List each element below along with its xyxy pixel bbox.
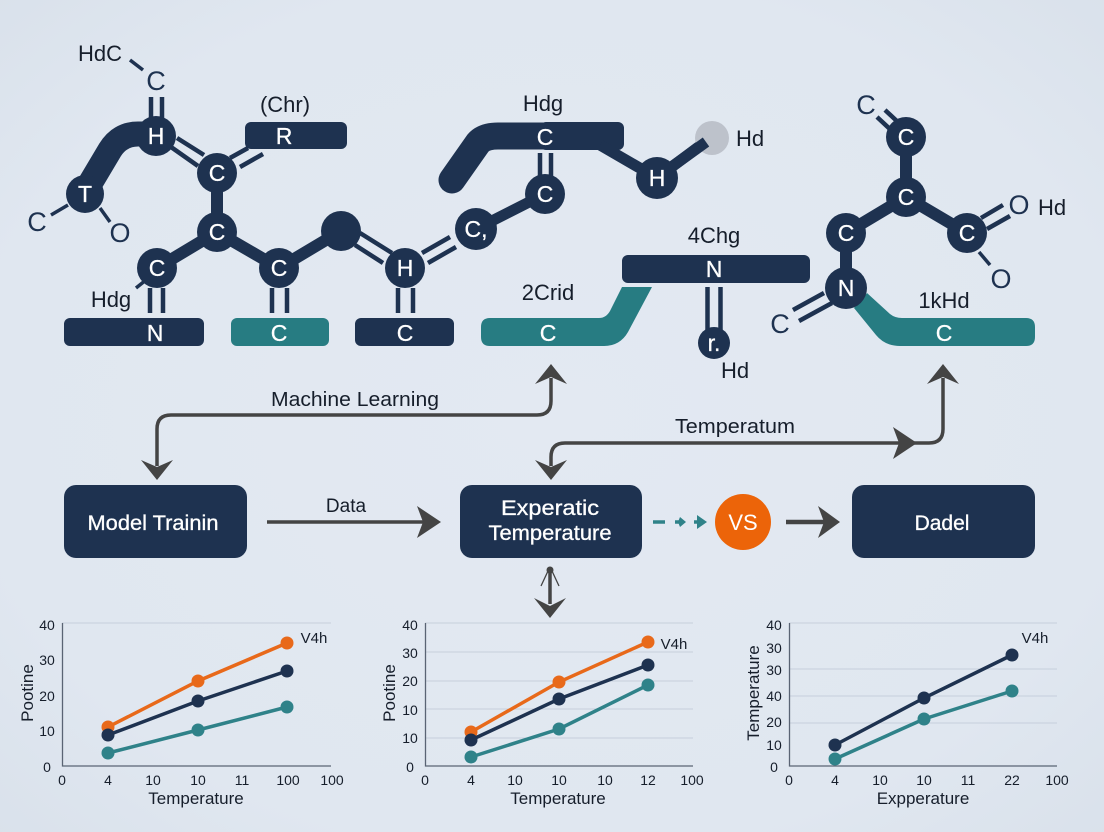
y axis ticks (39, 617, 55, 775)
atom: H lower (385, 248, 425, 288)
y axis ticks: 0 (406, 759, 414, 775)
atom: C middle: C (271, 255, 287, 281)
labels of right molecule: 1kHd (918, 288, 970, 313)
atom: H lower: H (397, 255, 413, 281)
labels of middle molecule (522, 91, 764, 383)
label: Data: Data (326, 496, 366, 517)
axis titles (18, 664, 244, 808)
labels of right molecule: C (856, 90, 876, 120)
atom: C left: C (838, 220, 854, 246)
x axis ticks: 10 (507, 772, 523, 788)
y axis ticks: 20 (766, 714, 782, 730)
series navy (828, 648, 1018, 752)
y axis ticks: 40 (39, 617, 55, 633)
atom: blank (321, 211, 361, 251)
atom: C right (947, 213, 987, 253)
bar: C (355, 318, 454, 346)
atom: C, (455, 208, 497, 250)
bar: teal C: C (271, 320, 287, 346)
labels of left molecule (27, 41, 310, 312)
badge: VS (715, 494, 771, 550)
atom: T: T (78, 181, 92, 207)
x axis ticks: 10 (872, 772, 888, 788)
y axis ticks (402, 617, 418, 775)
badge: VS: VS (728, 510, 758, 535)
atom: gray (695, 121, 729, 155)
atom: C middle (259, 248, 299, 288)
arrow: dashed teal (653, 515, 707, 529)
bonds of middle molecule (452, 122, 705, 229)
panel: middle molecule (452, 91, 810, 383)
arrow: temperature loop (535, 364, 959, 480)
atom: C top (886, 117, 926, 157)
arrow: Data (267, 506, 441, 538)
bar: N (622, 255, 810, 283)
atom: C left: C (149, 255, 165, 281)
teal bar: C with arm (854, 293, 1035, 346)
label: V4h: V4h (661, 636, 687, 653)
panel: left molecule (27, 41, 456, 346)
x axis ticks (58, 772, 344, 788)
axis titles (380, 664, 606, 808)
axis titles: Temperature (510, 789, 606, 808)
series orange (102, 636, 294, 734)
axis titles: Expperature (877, 789, 969, 808)
atom: H (136, 116, 176, 156)
labels of right molecule: C (770, 309, 790, 339)
x axis ticks: 4 (831, 772, 839, 788)
axis titles: Temperature (744, 645, 763, 741)
x axis ticks: 4 (104, 772, 112, 788)
axis titles (744, 645, 969, 808)
y axis ticks (766, 617, 782, 775)
y axis ticks: 10 (402, 730, 418, 746)
atom: H (636, 157, 678, 199)
label: top bar C: C (537, 124, 553, 150)
x axis ticks: 10 (551, 772, 567, 788)
bond and atom: r.: r. (708, 330, 720, 356)
atom: C right: C (959, 220, 975, 246)
y axis ticks: 20 (402, 673, 418, 689)
atom: H: H (148, 123, 164, 149)
label: V4h: V4h (1022, 630, 1048, 647)
x axis ticks (421, 772, 704, 788)
y axis ticks: 30 (766, 662, 782, 678)
x axis ticks: 22 (1004, 772, 1020, 788)
x axis ticks: 10 (190, 772, 206, 788)
x axis ticks: 11 (961, 772, 975, 788)
x axis ticks: 4 (467, 772, 475, 788)
x axis ticks: 100 (276, 772, 300, 788)
y axis ticks: 20 (39, 688, 55, 704)
series teal (828, 684, 1018, 766)
panel: right molecule (770, 90, 1066, 346)
atom: C left (826, 213, 866, 253)
labels of middle molecule: 4Chg (688, 223, 740, 248)
labels of left molecule: HdC (78, 41, 122, 66)
atom: C: C (537, 181, 553, 207)
x axis ticks: 12 (640, 772, 656, 788)
y axis ticks: 10 (766, 737, 782, 753)
box: Model Trainin (64, 485, 247, 558)
arrow: VS to Dadel (786, 506, 840, 538)
box: Experatic Temperature (460, 485, 642, 558)
atom: C centre (886, 177, 926, 217)
axis titles: Temperature (148, 789, 244, 808)
bar: N: N (147, 320, 163, 346)
labels of left molecule: O (109, 218, 131, 248)
labels of right molecule: Hd (1038, 195, 1066, 220)
labels of middle molecule: Hdg (523, 91, 563, 116)
labels of left molecule: C (27, 207, 47, 237)
y axis ticks: 10 (402, 702, 418, 718)
series teal (102, 700, 294, 760)
atom: C centre: C (898, 184, 914, 210)
atom: N (825, 267, 867, 309)
bonds of right molecule (793, 110, 1010, 321)
x axis ticks: 100 (680, 772, 704, 788)
bar: N: N (706, 256, 722, 282)
atom: N: N (838, 275, 854, 301)
atom: T (66, 175, 104, 213)
box: Dadel (852, 485, 1035, 558)
atom: C left (137, 248, 177, 288)
atom: H: H (649, 165, 665, 191)
labels of right molecule: O (1008, 190, 1030, 220)
series orange (464, 636, 654, 738)
label: V4h: V4h (301, 630, 327, 647)
atom: C upper (197, 153, 237, 193)
bar: teal C (231, 318, 329, 346)
chart 3 (744, 617, 1069, 808)
arrow: machine learning loop (141, 364, 567, 480)
box: Experatic Temperature: Experatic (501, 497, 599, 520)
labels of left molecule: Hdg (91, 287, 131, 312)
x axis ticks: 100 (320, 772, 344, 788)
atom: C upper: C (209, 160, 225, 186)
y axis ticks: 40 (402, 617, 418, 633)
labels of left molecule: C (146, 66, 166, 96)
x axis ticks: 10 (597, 772, 613, 788)
labels of left molecule: (Chr) (260, 92, 310, 117)
y axis ticks: 40 (766, 617, 782, 633)
x axis ticks: 0 (785, 772, 793, 788)
label: Temperatum: Temperatum (675, 416, 795, 438)
chart 1 (18, 617, 344, 808)
atom: C centre (197, 212, 237, 252)
atom: C top: C (898, 124, 914, 150)
x axis ticks: 10 (916, 772, 932, 788)
box: Experatic Temperature: Temperature (488, 522, 612, 545)
bond and atom: r. (698, 287, 730, 359)
bonds of left molecule (51, 60, 456, 313)
y axis ticks: 30 (402, 645, 418, 661)
labels of right molecule (770, 90, 1066, 339)
labels of right molecule: O (990, 264, 1012, 294)
arrow: vertical double (534, 566, 566, 618)
y axis ticks: 0 (43, 759, 51, 775)
x axis ticks (785, 772, 1069, 788)
x axis ticks: 100 (1045, 772, 1069, 788)
atom: C centre: C (209, 219, 225, 245)
bar: R: R (276, 123, 292, 149)
x axis ticks: 0 (58, 772, 66, 788)
series navy (464, 658, 654, 746)
x axis ticks: 10 (145, 772, 161, 788)
series teal (464, 678, 654, 764)
y axis ticks: 30 (766, 640, 782, 656)
bar: N (64, 318, 204, 346)
y axis ticks: 30 (39, 652, 55, 668)
teal bar: C with rising arm: C (540, 320, 556, 346)
labels of middle molecule: Hd (736, 126, 764, 151)
labels of middle molecule: 2Crid (522, 280, 574, 305)
axis titles: Pootine (18, 664, 37, 722)
labels of middle molecule: Hd (721, 358, 749, 383)
x axis ticks: 0 (421, 772, 429, 788)
x axis ticks: 11 (235, 772, 249, 788)
label: Machine Learning: Machine Learning (271, 389, 439, 411)
chart 2 (380, 617, 704, 808)
atom: C (525, 174, 565, 214)
box: Dadel: Dadel (915, 512, 969, 535)
bar: R (245, 122, 347, 149)
series navy (102, 664, 294, 742)
y axis ticks: 40 (766, 688, 782, 704)
bar: C: C (397, 320, 413, 346)
atom: C,: C, (464, 216, 488, 242)
y axis ticks: 0 (770, 759, 778, 775)
axis titles: Pootine (380, 664, 399, 722)
box: Model Trainin: Model Trainin (88, 512, 218, 535)
y axis ticks: 10 (39, 723, 55, 739)
teal bar: C with rising arm (481, 287, 652, 346)
bond to gray atom (670, 142, 706, 168)
teal bar: C with arm: C (936, 320, 952, 346)
